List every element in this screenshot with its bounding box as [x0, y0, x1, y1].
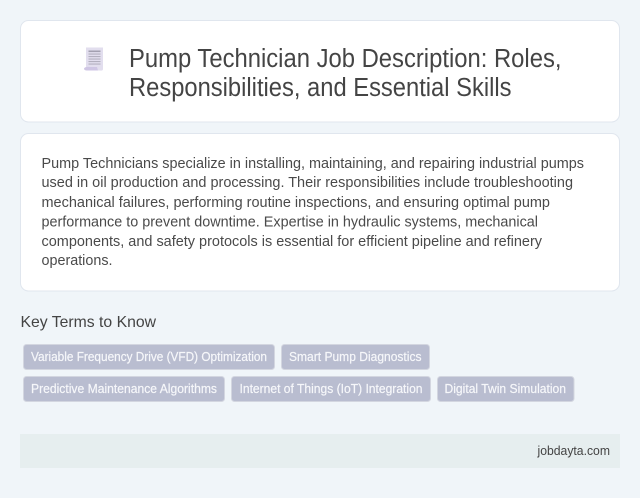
- footer bar: jobdayta.com: [537, 444, 610, 458]
- text block: description: Pump Technicians specialize in installing, maintaining, and repairing industrial pumps: [42, 156, 584, 172]
- heading: Responsibilities, and Essential Skills: [129, 74, 512, 102]
- text block: description: mechanical failures, performing routine inspections, and ensuring optimal pump: [42, 195, 550, 211]
- chip: digital twin: Digital Twin Simulation: [444, 382, 566, 396]
- panel: title card: [20, 20, 620, 122]
- chip: variable frequency drive: [24, 344, 274, 370]
- icon: document scroll: [84, 48, 103, 71]
- chip: predictive maintenance: Predictive Maintenance Algorithms: [31, 382, 217, 396]
- chip: digital twin: [438, 376, 574, 402]
- chip: smart pump diagnostics: Smart Pump Diagnostics: [289, 350, 422, 364]
- text block: description: performance to prevent downtime. Expertise in hydraulic systems, mechanical: [42, 214, 538, 230]
- panel: description card: [20, 134, 620, 291]
- footer bar: [20, 434, 620, 468]
- heading: [129, 45, 562, 102]
- text block: description: components, and safety protocols is essential for efficient pipeline and refinery: [42, 234, 543, 250]
- text block: description: used in oil production and processing. Their responsibilities include troubleshooting: [42, 175, 573, 191]
- chip: variable frequency drive: Variable Frequency Drive (VFD) Optimization: [31, 350, 267, 364]
- text block: description: operations.: [42, 253, 112, 269]
- heading: key terms: Key Terms to Know: [20, 314, 156, 331]
- chip: smart pump diagnostics: [282, 344, 430, 370]
- text block: description: [42, 156, 584, 269]
- chip: predictive maintenance: [24, 376, 224, 402]
- heading: Pump Technician Job Description: Roles,: [129, 45, 562, 73]
- chip: internet of things: Internet of Things (IoT) Integration: [240, 382, 423, 396]
- chip: internet of things: [232, 376, 430, 402]
